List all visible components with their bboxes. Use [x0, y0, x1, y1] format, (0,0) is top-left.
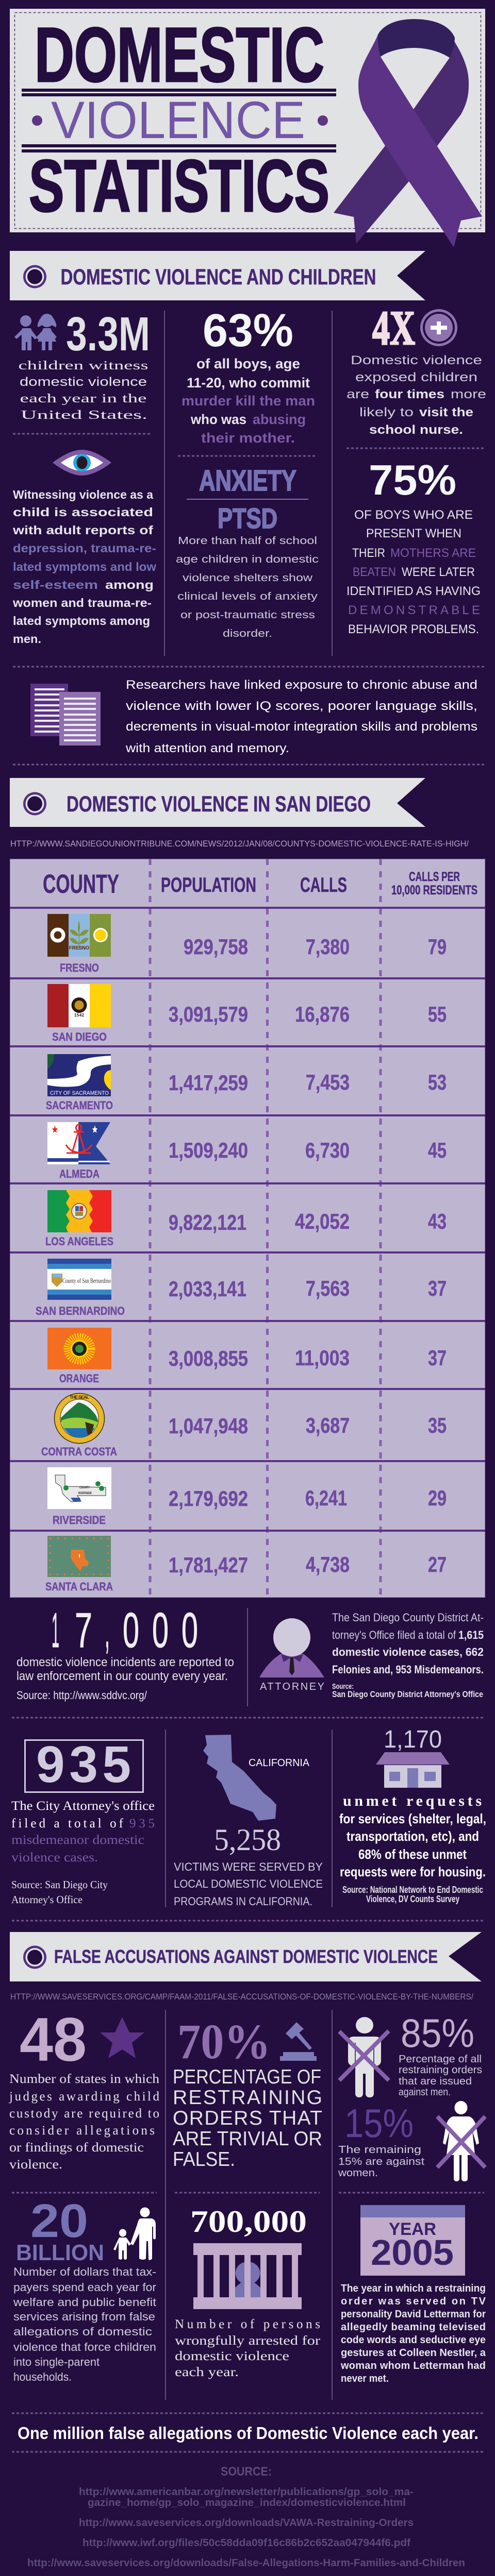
- panel: 63% of boys: of all boys, age: [196, 356, 300, 371]
- panel: year 2005: code words and seductive eye: [341, 2334, 486, 2346]
- source url: san diego: HTTP://WWW.SANDIEGOUNIONTRIBUNE.COM/NEWS/2012/JAN/08/COUNTYS-DOMESTIC-VIOLENCE-RATE-IS-HIGH/: [10, 839, 469, 849]
- sources list: http://www.saveservices.org/downloads/False-Allegations-Harm-Families-and-Children: [27, 2557, 465, 2569]
- panel: 75% of boys: BEATEN: [353, 565, 396, 579]
- flag: san diego: 1542: [74, 1013, 85, 1018]
- row: contra costa: 35: [428, 1413, 447, 1437]
- sources list: gazine_home/gp_solo_magazine_index/domesticviolence.html: [88, 2497, 406, 2509]
- flag: riverside: [47, 1467, 111, 1509]
- row: alameda: 6,730: [305, 1138, 350, 1162]
- panel: year 2005: woman whom Letterman had: [340, 2360, 486, 2371]
- text block: witnessing violence: depression, trauma-re-: [13, 541, 156, 555]
- panel: 75% of boys: [346, 456, 481, 636]
- icon: attorney: [259, 1618, 324, 1692]
- panel: year 2005: order was served on TV: [341, 2296, 486, 2307]
- panel: 63% of boys: abusing: [253, 412, 306, 427]
- row: alameda: 45: [428, 1138, 447, 1162]
- panel: 15% against women: The remaining: [338, 2144, 421, 2156]
- panel: 935 misdemeanor cases: misdemeanor domestic: [11, 1833, 144, 1847]
- icon: gavel: [280, 2022, 317, 2061]
- row: riverside: [47, 1467, 447, 1527]
- panel: year 2005: gestures at Colleen Nestler, a: [341, 2347, 486, 2359]
- panel: 4X school nurse: exposed children: [355, 370, 477, 384]
- panel: 935 misdemeanor cases: The City Attorney's office: [11, 1799, 155, 1813]
- panel: 20 billion: Number of dollars that tax-: [13, 2265, 156, 2278]
- flag: san bernardino: [47, 1259, 111, 1300]
- row: sacramento: SACRAMENTO: [46, 1099, 113, 1112]
- row: san bernardino: 7,563: [306, 1276, 350, 1300]
- row: sacramento: 7,453: [306, 1070, 350, 1094]
- text block: witnessing violence: among: [105, 578, 154, 591]
- panel: 700,000 arrested: 700,000: [190, 2205, 307, 2239]
- panel: 70% restraining orders: [173, 2014, 322, 2171]
- panel: 17,000 incidents: 1: [52, 1603, 59, 1658]
- panel: 75% of boys: WERE LATER: [402, 565, 475, 579]
- panel: 75% of boys: OF BOYS WHO ARE: [354, 508, 473, 522]
- icon: crossed-out woman: [437, 2101, 485, 2181]
- title: VIOLENCE: VIOLENCE: [51, 91, 305, 149]
- row: fresno: 7,380: [306, 935, 350, 959]
- panel: year 2005: [340, 2205, 486, 2384]
- row: alameda: [47, 1122, 447, 1180]
- text block: researchers: decrements in visual-motor integration skills and problems: [126, 720, 477, 734]
- flag: riverside: COUNTY: [79, 1486, 90, 1489]
- icon: calendar: [360, 2205, 465, 2276]
- text block: district attorney: domestic violence cases, 662: [332, 1646, 484, 1658]
- panel: 1,170 unmet requests: 68% of these unmet: [358, 1846, 467, 1862]
- panel: 4X school nurse: are: [346, 387, 369, 401]
- panel: 4X school nurse: school nurse.: [369, 423, 463, 437]
- panel: 48 states: judges awarding child: [9, 2090, 160, 2104]
- row: los angeles: [45, 1190, 447, 1248]
- panel: 85% against men: against men.: [399, 2087, 451, 2098]
- row: santa clara: 4,738: [306, 1552, 350, 1577]
- text block: witnessing violence: with adult reports of: [12, 523, 153, 537]
- panel: 935 misdemeanor cases: 935: [36, 1736, 131, 1793]
- panel: 20 billion: violence that force children: [13, 2341, 156, 2353]
- panel: 48 states: consider allegations: [9, 2124, 155, 2138]
- row: santa clara: [45, 1536, 447, 1593]
- icon: eye: [53, 450, 111, 476]
- panel: 63% of boys: their mother.: [201, 430, 295, 446]
- row: orange: 3,008,855: [169, 1346, 248, 1370]
- text block: witnessing violence: [12, 488, 156, 646]
- panel: 4X school nurse: Domestic violence: [351, 353, 482, 367]
- panel: year 2005: never met.: [341, 2373, 389, 2384]
- row: san bernardino: SAN BERNARDINO: [36, 1304, 125, 1317]
- flag: santa clara: [47, 1536, 111, 1577]
- panel: 48 states: Number of states in which: [9, 2072, 160, 2086]
- table header: POPULATION: [161, 874, 256, 896]
- panel: 700,000 arrested: wrongfully arrested for: [175, 2334, 321, 2348]
- flag: los angeles: [47, 1190, 111, 1232]
- panel: 935 misdemeanor cases: 935: [129, 1817, 155, 1831]
- flag: orange: [47, 1328, 111, 1369]
- panel: 20 billion: welfare and public benefit: [13, 2296, 156, 2309]
- panel: 75% of boys: MOTHERS ARE: [390, 546, 476, 560]
- row: san diego: 16,876: [295, 1002, 350, 1026]
- panel: 63% of boys: murder kill the man: [182, 393, 315, 409]
- row: santa clara: SANTA CLARA: [45, 1580, 113, 1593]
- flag: sacramento: CITY OF SACRAMENTO: [50, 1090, 109, 1096]
- panel: year 2005: personality David Letterman for: [341, 2309, 486, 2320]
- row: los angeles: 42,052: [295, 1209, 350, 1233]
- panel: 3.3M children: [14, 307, 150, 422]
- row: contra costa: 3,687: [306, 1413, 350, 1437]
- sources list: http://www.americanbar.org/newsletter/publications/gp_solo_ma-: [79, 2486, 414, 2498]
- row: fresno: FRESNO: [60, 961, 99, 974]
- panel: 17,000 incidents: law enforcement in our county every year.: [16, 1669, 228, 1683]
- text block: witnessing violence: lated symptoms among: [13, 614, 150, 628]
- title: DOMESTIC: DOMESTIC: [35, 11, 324, 98]
- row: sacramento: 1,417,259: [169, 1071, 248, 1095]
- panel: 17,000 incidents: 7: [75, 1603, 92, 1658]
- row: riverside: 29: [428, 1486, 447, 1510]
- panel: 3.3M children: United States.: [21, 409, 147, 422]
- text block: district attorney: torney's Office filed a total of: [332, 1629, 456, 1641]
- panel: 4X school nurse: likely to: [359, 405, 414, 419]
- panel: 17,000 incidents: ,: [105, 1603, 110, 1658]
- panel: 70% restraining orders: 70%: [177, 2014, 271, 2069]
- panel: 20 billion: into single-parent: [13, 2355, 100, 2368]
- icon: medical plus: [420, 309, 457, 346]
- row: contra costa: [41, 1393, 447, 1458]
- panel: 75% of boys: 75%: [369, 456, 456, 504]
- panel: california: PROGRAMS IN CALIFORNIA.: [174, 1895, 312, 1908]
- icon: father and child: [113, 2207, 156, 2260]
- panel: anxiety and PTSD: PTSD: [218, 502, 277, 534]
- panel: 70% restraining orders: RESTRAINING: [173, 2087, 322, 2109]
- panel: 1,170 unmet requests: unmet requests: [343, 1792, 482, 1809]
- icon: calendar: YEAR: [389, 2219, 436, 2239]
- flag: riverside: RIVERSIDE: [78, 1492, 92, 1495]
- panel: 75% of boys: DEMONSTRABLE: [348, 603, 480, 617]
- panel: 3.3M children: 3.3M: [66, 307, 150, 361]
- row: san bernardino: 37: [428, 1276, 447, 1300]
- panel: anxiety and PTSD: disorder.: [223, 628, 272, 639]
- panel: california: CALIFORNIA: [249, 1757, 310, 1769]
- row: san diego: SAN DIEGO: [52, 1030, 107, 1043]
- flag: san bernardino: County of San Bernardino: [62, 1277, 111, 1284]
- text block: witnessing violence: lated symptoms and low: [13, 560, 156, 573]
- table: county data: [10, 859, 485, 1597]
- row: san diego: [47, 984, 447, 1043]
- row: alameda: 1,509,240: [169, 1138, 248, 1162]
- panel: california: VICTIMS WERE SERVED BY: [174, 1860, 323, 1873]
- panel: 20 billion: BILLION: [16, 2240, 104, 2265]
- text block: district attorney: 1,615: [458, 1629, 484, 1641]
- panel: 3.3M children: children witness: [19, 359, 148, 372]
- panel: california: 5,258: [214, 1823, 281, 1857]
- row: alameda: ALMEDA: [59, 1167, 100, 1180]
- row: sacramento: 53: [428, 1070, 447, 1094]
- panel: 63% of boys: [182, 305, 315, 446]
- panel: 48 states: or findings of domestic: [9, 2141, 144, 2155]
- panel: 20 billion: [13, 2195, 156, 2383]
- panel: anxiety and PTSD: [176, 464, 319, 639]
- panel: 20 billion: 20: [30, 2195, 88, 2247]
- row: los angeles: 9,822,121: [169, 1210, 246, 1234]
- panel: 85% against men: 85%: [401, 2010, 474, 2056]
- panel: 935 misdemeanor cases: Attorney's Office: [11, 1893, 82, 1906]
- row: san diego: 3,091,579: [169, 1002, 248, 1026]
- section banner: domestic violence in san diego: DOMESTIC VIOLENCE IN SAN DIEGO: [67, 792, 371, 817]
- panel: 20 billion: allegations of domestic: [13, 2325, 152, 2338]
- icon: california map: [203, 1735, 276, 1821]
- panel: 4X school nurse: 4X: [372, 301, 415, 355]
- icon: documents: [30, 684, 101, 745]
- panel: 15% against women: 15% are against: [338, 2156, 425, 2167]
- panel: anxiety and PTSD: More than half of school: [178, 535, 317, 547]
- sources list: http://www.saveservices.org/downloads/VAWA-Restraining-Orders: [79, 2517, 414, 2529]
- flag: san diego: [47, 984, 111, 1027]
- panel: 85% against men: restraining orders: [399, 2064, 482, 2076]
- text block: witnessing violence: women and trauma-re-: [12, 596, 152, 609]
- panel: 17,000 incidents: Source: http://www.sddvc.org/: [16, 1689, 147, 1702]
- text block: researchers: Researchers have linked exposure to chronic abuse and: [126, 678, 477, 692]
- text block: district attorney: Source:: [332, 1682, 354, 1691]
- section banner: false accusations: [10, 1932, 482, 1981]
- row: fresno: 79: [428, 935, 447, 959]
- row: santa clara: 27: [428, 1552, 447, 1577]
- text block: witnessing violence: Witnessing violence as a: [13, 488, 153, 501]
- panel: 1,170 unmet requests: 1,170: [384, 1726, 442, 1753]
- panel: 700,000 arrested: each year.: [175, 2365, 239, 2379]
- panel: 85% against men: Percentage of all: [399, 2054, 482, 2065]
- panel: 15% against women: [338, 2100, 485, 2181]
- sources list: SOURCE:: [221, 2465, 272, 2479]
- panel: 75% of boys: PRESENT WHEN: [366, 527, 461, 540]
- section banner: domestic violence and children: DOMESTIC VIOLENCE AND CHILDREN: [61, 265, 376, 290]
- panel: 17,000 incidents: [16, 1603, 234, 1702]
- panel: 4X school nurse: more: [451, 387, 486, 401]
- panel: anxiety and PTSD: ANXIETY: [199, 464, 296, 497]
- panel: year 2005: The year in which a restraining: [341, 2283, 486, 2294]
- flag: fresno: [47, 914, 111, 957]
- row: san bernardino: [36, 1259, 447, 1317]
- panel: 75% of boys: BEHAVIOR PROBLEMS.: [348, 622, 479, 636]
- panel: 20 billion: households.: [13, 2370, 72, 2383]
- panel: 3.3M children: each year in the: [20, 392, 146, 405]
- panel: 20 billion: payers spend each year for: [13, 2281, 156, 2294]
- panel: 63% of boys: 11-20, who commit: [187, 375, 310, 391]
- row: orange: 11,003: [295, 1346, 350, 1370]
- panel: anxiety and PTSD: clinical levels of anxiety: [177, 591, 318, 602]
- table header: COUNTY: [43, 869, 119, 899]
- panel: california: LOCAL DOMESTIC VIOLENCE: [174, 1877, 323, 1890]
- panel: 63% of boys: 63%: [203, 305, 293, 357]
- icon: calendar: 2005: [371, 2232, 454, 2273]
- panel: anxiety and PTSD: age children in domestic: [176, 554, 319, 565]
- icon: crossed-out man: [339, 2017, 389, 2097]
- panel: anxiety and PTSD: or post-traumatic stress: [180, 609, 315, 621]
- table header: [43, 869, 477, 899]
- panel: 15% against women: 15%: [344, 2100, 414, 2146]
- panel: 20 billion: services arising from false: [13, 2310, 155, 2323]
- panel: 17,000 incidents: 0: [182, 1603, 198, 1658]
- panel: 935 misdemeanor cases: [11, 1736, 155, 1906]
- panel: 48 states: [9, 2005, 160, 2172]
- sources list: [27, 2465, 465, 2576]
- panel: 75% of boys: THEIR: [352, 546, 385, 560]
- panel: 4X school nurse: visit the: [419, 405, 473, 419]
- icon: person in jail: [193, 2243, 302, 2309]
- flag: sacramento: [47, 1054, 111, 1096]
- icon: boy and girl: [14, 314, 57, 350]
- row: los angeles: 43: [428, 1209, 447, 1233]
- row: fresno: [47, 914, 447, 974]
- row: contra costa: 1,047,948: [169, 1414, 248, 1438]
- row: orange: 37: [428, 1346, 447, 1370]
- row: orange: ORANGE: [59, 1372, 99, 1385]
- panel: 935 misdemeanor cases: filed a total of: [11, 1817, 124, 1831]
- icon: attorney: ATTORNEY: [260, 1681, 324, 1692]
- panel: anxiety and PTSD: violence shelters show: [183, 572, 313, 584]
- text block: district attorney: [332, 1611, 484, 1699]
- panel: 48 states: 48: [20, 2005, 87, 2074]
- panel: 700,000 arrested: Number of persons: [175, 2317, 320, 2331]
- row: santa clara: 1,781,427: [169, 1553, 248, 1577]
- panel: 3.3M children: domestic violence: [20, 375, 147, 389]
- row: san bernardino: 2,033,141: [169, 1277, 246, 1301]
- panel: 85% against men: that are issued: [399, 2076, 472, 2087]
- flag: alameda: [47, 1122, 110, 1164]
- header panel: [10, 9, 485, 232]
- row: fresno: 929,758: [184, 935, 248, 959]
- icon: awareness ribbon: [334, 19, 482, 247]
- panel: year 2005: allegedly beaming televised: [341, 2321, 486, 2333]
- panel: 75% of boys: IDENTIFIED AS HAVING: [346, 584, 481, 598]
- panel: 70% restraining orders: ORDERS THAT: [173, 2107, 322, 2129]
- sources list: http://www.iwf.org/files/50c58dda09f16c86b2c652aa047944f6.pdf: [82, 2537, 410, 2549]
- seal: contra costa: THE SEAL: [70, 1395, 90, 1400]
- text block: researchers: violence with lower IQ scores, poorer language skills,: [126, 699, 477, 713]
- icon: star: [100, 2017, 144, 2058]
- panel: 15% against women: women.: [338, 2167, 378, 2179]
- table header: CALLS PER: [409, 870, 460, 884]
- panel: 700,000 arrested: domestic violence: [175, 2349, 289, 2363]
- panel: 1,170 unmet requests: Violence, DV Counts Survey: [366, 1894, 459, 1904]
- text block: witnessing violence: child is associated: [13, 505, 153, 519]
- panel: 700,000 arrested: [175, 2205, 321, 2379]
- title: STATISTICS: STATISTICS: [29, 145, 329, 227]
- row: riverside: RIVERSIDE: [53, 1514, 106, 1527]
- panel: 48 states: custody are required to: [9, 2107, 159, 2121]
- icon: house: [376, 1752, 450, 1788]
- text block: researchers: with attention and memory.: [125, 741, 289, 755]
- row: riverside: 6,241: [305, 1486, 347, 1510]
- text block: researchers: [125, 678, 477, 755]
- text block: witnessing violence: self-esteem: [13, 578, 98, 591]
- panel: 17,000 incidents: 0: [152, 1603, 169, 1658]
- panel: 85% against men: [339, 2010, 482, 2098]
- row: riverside: 2,179,692: [169, 1486, 248, 1511]
- seal: contra costa: [55, 1393, 104, 1444]
- panel: 935 misdemeanor cases: violence cases.: [11, 1851, 98, 1865]
- panel: 63% of boys: who was: [190, 412, 246, 427]
- panel: 48 states: violence.: [9, 2158, 62, 2172]
- panel: california: [174, 1735, 323, 1908]
- flag: fresno: FRESNO: [69, 945, 89, 951]
- panel: 1,170 unmet requests: [339, 1726, 486, 1904]
- row: los angeles: LOS ANGELES: [45, 1235, 113, 1248]
- panel: 935 misdemeanor cases: Source: San Diego City: [11, 1878, 108, 1891]
- panel: 70% restraining orders: ARE TRIVIAL OR: [173, 2128, 322, 2150]
- table header: CALLS: [300, 874, 347, 896]
- section banner: domestic violence in san diego: [10, 778, 425, 827]
- panel: 70% restraining orders: PERCENTAGE OF: [173, 2066, 321, 2088]
- text block: witnessing violence: men.: [13, 632, 41, 646]
- panel: 17,000 incidents: domestic violence incidents are reported to: [16, 1655, 234, 1669]
- panel: 70% restraining orders: FALSE.: [173, 2148, 235, 2171]
- section banner: domestic violence and children: [10, 251, 425, 300]
- panel: 4X school nurse: four times: [375, 387, 444, 401]
- row: sacramento: [46, 1054, 447, 1112]
- panel: 4X school nurse: [346, 301, 486, 437]
- panel: 17,000 incidents: 0: [123, 1603, 139, 1658]
- row: contra costa: CONTRA COSTA: [41, 1445, 117, 1458]
- row: orange: [47, 1328, 447, 1385]
- row: san diego: 55: [428, 1002, 447, 1026]
